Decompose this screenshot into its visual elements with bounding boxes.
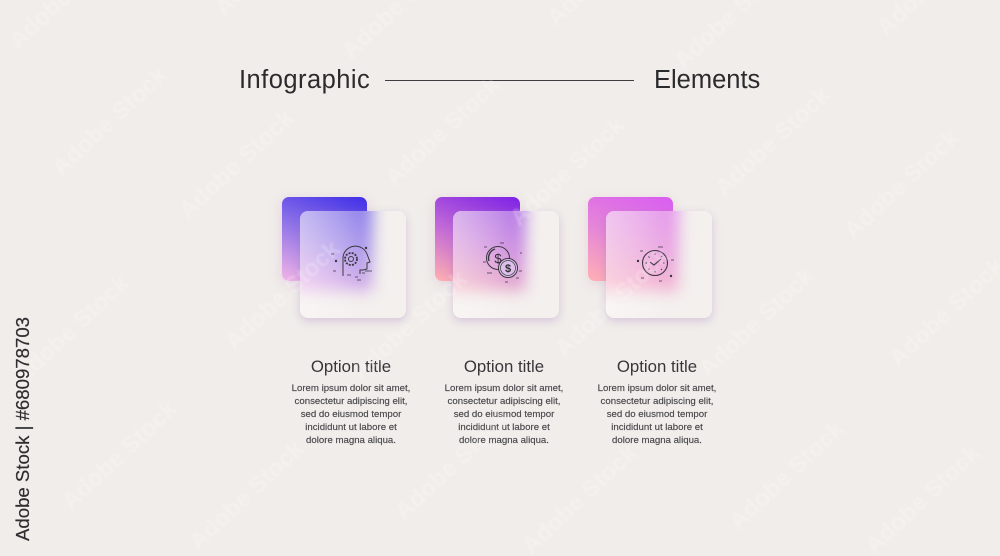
watermark layer: Adobe Stock <box>710 82 836 202</box>
front glass card <box>453 211 559 318</box>
panel: option 2 card stack <box>432 197 562 324</box>
panel: option 3 card stack <box>585 197 716 324</box>
heading right: Elements: Elements <box>654 66 760 94</box>
front glass card <box>606 211 712 318</box>
text block: option 2: dolore magna aliqua. <box>459 435 549 446</box>
icon: dollar coins: $ <box>494 251 502 266</box>
text block: option 3: sed do eiusmod tempor <box>607 409 707 420</box>
icon: dollar coins <box>483 242 522 282</box>
text block: option 2: sed do eiusmod tempor <box>454 409 554 420</box>
watermark layer: Adobe Stock <box>550 243 676 363</box>
text block: option 1: incididunt ut labore et <box>305 422 397 433</box>
text block: option 2: incididunt ut labore et <box>458 422 550 433</box>
text block: option 1: Option title <box>311 357 391 376</box>
watermark layer: Adobe Stock <box>174 105 300 225</box>
text block: option 3 <box>598 357 716 446</box>
watermark layer: Adobe Stock <box>184 436 310 556</box>
watermark layer: Adobe Stock <box>47 62 173 182</box>
text block: option 2: Lorem ipsum dolor sit amet, <box>445 383 563 394</box>
watermark layer: Adobe Stock <box>724 416 850 536</box>
icon: dollar coins: $ <box>505 263 511 275</box>
watermark layer: Adobe Stock <box>517 440 643 556</box>
watermark layer: Adobe Stock <box>390 406 516 526</box>
text block: option 2: consectetur adipiscing elit, <box>448 396 560 407</box>
back square: pink gradient <box>588 197 673 281</box>
watermark layer: Adobe Stock <box>694 263 820 383</box>
text block: option 1: Lorem ipsum dolor sit amet, <box>292 383 410 394</box>
heading left: Infographic: Infographic <box>239 66 370 94</box>
text block: option 3: Lorem ipsum dolor sit amet, <box>598 383 716 394</box>
text block: option 1: consectetur adipiscing elit, <box>295 396 407 407</box>
text block: option 3: Option title <box>617 357 697 376</box>
watermark layer: Adobe Stock <box>380 72 506 192</box>
side credit: Adobe Stock id: Adobe Stock | #680978703 <box>12 317 33 541</box>
watermark layer: Adobe Stock <box>220 236 346 356</box>
watermark layer: Adobe Stock <box>57 396 183 516</box>
watermark layer: Adobe Stock <box>860 440 986 556</box>
watermark layer: Adobe Stock <box>839 125 965 245</box>
text block: option 3: dolore magna aliqua. <box>612 435 702 446</box>
text block: option 3: consectetur adipiscing elit, <box>601 396 713 407</box>
watermark layer: Adobe Stock <box>505 112 631 232</box>
watermark layer: Adobe Stock <box>9 270 135 390</box>
text block: option 2: Option title <box>464 357 544 376</box>
front glass card <box>300 211 406 318</box>
icon: clock with check <box>636 246 674 282</box>
back square: indigo gradient <box>282 197 367 281</box>
text block: option 1: dolore magna aliqua. <box>306 435 396 446</box>
panel: option 1 card stack <box>278 196 410 324</box>
text block: option 2 <box>445 357 563 446</box>
heading connector line <box>385 80 634 81</box>
text block: option 1: sed do eiusmod tempor <box>301 409 401 420</box>
icon: head with gear <box>331 246 372 280</box>
text block: option 1 <box>292 357 410 446</box>
text block: option 3: incididunt ut labore et <box>611 422 703 433</box>
back square: violet gradient <box>435 197 520 281</box>
watermark layer: Adobe Stock <box>347 266 473 386</box>
